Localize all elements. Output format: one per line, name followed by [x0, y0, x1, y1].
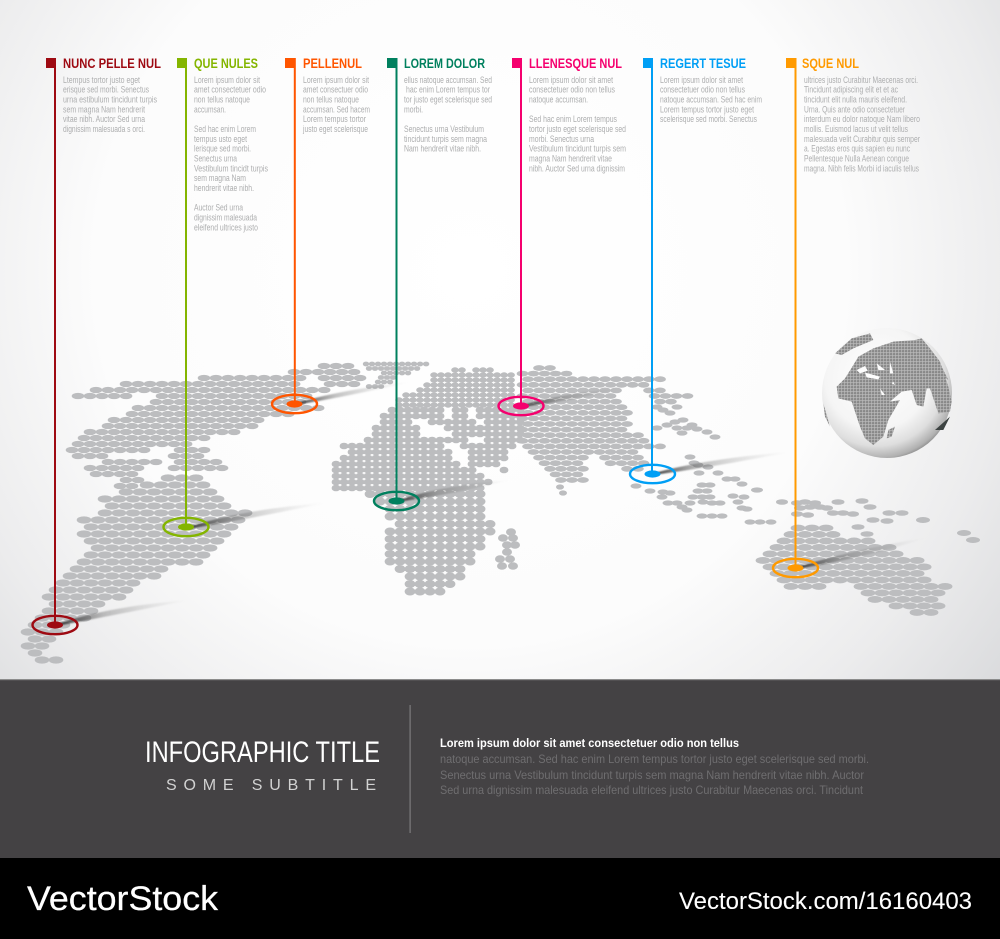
text: column 6 [660, 75, 762, 124]
heading: Nunc Pelle Nul: NUNC PELLE NUL [63, 56, 161, 71]
text: column 7: interdum eu dolor natoque Nam libero [804, 114, 920, 124]
text: column 7: Pellentesque Nulla Aenean congue [804, 154, 909, 164]
text: column 6: natoque accumsan. Sed hac enim [660, 94, 762, 104]
footer text block: Sed urna dignissim malesuada eleifend ultrices justo Curabitur Maecenas orci. Tincidunt [440, 783, 864, 797]
text: column 2: sem magna Nam [194, 173, 246, 183]
logo text: VectorStock [27, 880, 219, 918]
text: column 6: consectetuer odio non tellus [660, 85, 745, 95]
pin 2: green [164, 56, 268, 536]
pin shadows [57, 382, 925, 626]
text: column 5: natoque accumsan. [529, 94, 588, 104]
text: column 5: morbi. Senectus urna [529, 134, 594, 144]
text: column 4: tincidunt turpis sem magna [404, 134, 487, 144]
pin 5: pink [498, 56, 626, 415]
text: column 2: accumsan. [194, 104, 226, 114]
map: South America [28, 478, 252, 660]
text: column 1: urna estibulum tincidunt turpis [63, 94, 157, 104]
text: column 1: erisque sed morbi. Senectus [63, 85, 149, 95]
text: column 4: morbi. [404, 104, 423, 114]
text: column 7: ultrices justo Curabitur Maecenas orci. [804, 75, 918, 85]
text: column 4: Senectus urna Vestibulum [404, 124, 484, 134]
heading: Sque Nul: SQUE NUL [802, 56, 859, 71]
text: column 7: a. Egestas eros quis sapien eu nunc [804, 144, 910, 154]
text: column 1: sem magna Nam hendrerit [63, 104, 145, 114]
text: column 6: Lorem ipsum dolor sit amet [660, 75, 743, 85]
background [0, 0, 1000, 680]
pin 6: blue [630, 56, 762, 483]
text: column 7: mollis. Euismod lacus ut velit tellus [804, 124, 908, 134]
text: column 7: Urna. Quis ante odio consectetuer [804, 104, 905, 114]
pin 4: teal [374, 56, 492, 510]
text: column 4: Nam hendrerit vitae nibh. [404, 144, 481, 154]
text: column 5: nibh. Auctor Sed urna dignissim [529, 163, 625, 173]
map: Madagascar [495, 528, 520, 570]
text: column 5: consectetuer odio non tellus [529, 85, 615, 95]
map: islands [556, 404, 980, 543]
text: column 3: Lorem tempus tortor [303, 114, 366, 124]
text: column 4: ellus natoque accumsan. Sed [404, 75, 492, 85]
text: column 1: Ltempus tortor justo eget [63, 75, 140, 85]
map: southern Europe and northern Africa [336, 410, 520, 488]
pin 3: orange [272, 56, 370, 413]
text: column 5: magna Nam hendrerit vitae [529, 154, 612, 164]
text: column 6: Lorem tempus tortor justo eget [660, 104, 754, 114]
text: column 3: amet consectuer odio [303, 85, 368, 95]
text: column 2: Senectus urna [194, 154, 237, 164]
footer text block: Senectus urna Vestibulum tincidunt turpis sem magna Nam hendrerit vitae nibh. Auctor [440, 768, 864, 782]
text: column 7: tincidunt elit nulla mauris eleifend. [804, 94, 907, 104]
text: column 3: Lorem ipsum dolor sit [303, 75, 369, 85]
footer text block [440, 736, 869, 797]
text: column 2: Sed hac enim Lorem [194, 124, 256, 134]
globe [822, 328, 952, 458]
text: column 7: malesuada velit Curabitur quis semper [804, 134, 920, 144]
text: column 3: accumsan. Sed hacem [303, 104, 370, 114]
text: column 7 [804, 75, 920, 173]
text: column 2: lerisque sed morbi. [194, 144, 251, 154]
text: column 2: Auctor Sed urna [194, 203, 243, 213]
footer text block: Lorem ipsum dolor sit amet consectetuer odio non tellus [440, 736, 739, 750]
text: column 2: non tellus natoque [194, 94, 250, 104]
map: Asia [522, 368, 688, 480]
text: column 4: tor justo eget scelerisque sed [404, 94, 492, 104]
text: column 7: Tincidunt adipiscing elit et et ac [804, 85, 898, 95]
dotted world map [28, 364, 980, 660]
text: column 5: tortor justo eget scelerisque sed [529, 124, 626, 134]
text: column 1 [63, 75, 157, 134]
text: column 2: hendrerit vitae nibh. [194, 183, 254, 193]
map: Greenland [366, 364, 426, 386]
map: North and Central America [72, 366, 360, 486]
panel: watermark bar [0, 858, 1000, 939]
heading: Que Nules: QUE NULES [194, 56, 258, 71]
text: column 2: tempus usto eget [194, 134, 247, 144]
text: column 2: Vestibulum tincidt turpis [194, 163, 268, 173]
text: column 2: amet consectetuer odio [194, 85, 266, 95]
subtitle: SOME SUBTITLE [166, 777, 376, 794]
text: column 2: dignissim malesuada [194, 213, 257, 223]
text: column 5 [529, 75, 626, 173]
heading: Regert Tesue: REGERT TESUE [660, 56, 746, 71]
image url text: VectorStock.com/16160403 [679, 888, 972, 915]
heading: Lorem Dolor: LOREM DOLOR [404, 56, 485, 71]
text: column 6: scelerisque sed morbi. Senectus [660, 114, 757, 124]
heading: Pellenul: PELLENUL [303, 56, 362, 71]
text: column 3: justo eget scelerisque [302, 124, 368, 134]
panel: title footer [0, 679, 1000, 858]
title: INFOGRAPHIC TITLE [145, 736, 380, 769]
text: column 5: Vestibulum tincidunt turpis sem [529, 144, 626, 154]
map: Australia [763, 528, 945, 612]
text: column 4 [404, 75, 492, 154]
heading: Llenesque Nul: LLENESQUE NUL [529, 56, 622, 71]
text: column 2 [194, 75, 268, 232]
text: column 4: hac enim Lorem tempus tor [406, 85, 490, 95]
pin 7: amber [773, 56, 920, 577]
map: northern Europe [399, 370, 518, 405]
text: column 5: Sed hac enim Lorem tempus [529, 114, 617, 124]
text: column 2: Lorem ipsum dolor sit [194, 75, 260, 85]
text: column 3: non tellus natoque [303, 94, 359, 104]
text: column 3 [302, 75, 370, 134]
pin 1: dark red [32, 56, 161, 634]
map: southern Africa [370, 494, 500, 592]
footer text block: natoque accumsan. Sed hac enim Lorem tempus tortor justo eget scelerisque sed morbi. [440, 752, 869, 766]
text: column 5: Lorem ipsum dolor sit amet [529, 75, 613, 85]
text: column 2: eleifend ultrices justo [194, 222, 258, 232]
text: column 1: dignissim malesuada s orci. [63, 124, 145, 134]
text: column 1: vitae nibh. Auctor Sed urna [63, 114, 145, 124]
text: column 7: magna. Nibh felis Morbi id iaculis tellus [804, 163, 919, 173]
